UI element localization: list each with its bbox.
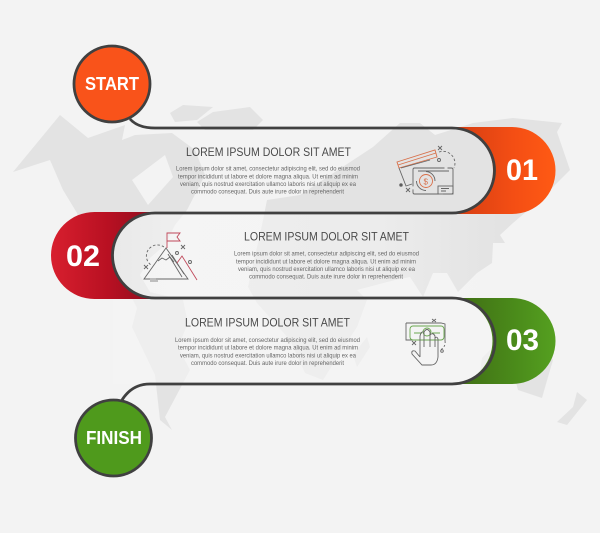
text block 01: Lorem ipsum dolor sit amet, consectetur adipiscing elit, sed do eiusmod [176, 166, 360, 172]
text block 02: veniam, quis nostrud exercitation ullamco laboris nisi ut aliquip ex ea [238, 266, 415, 273]
text block 03: LOREM IPSUM DOLOR SIT AMET [185, 316, 350, 330]
text block 01 [176, 145, 360, 196]
number 02: 02 [66, 240, 100, 273]
band 03 colour tab [450, 298, 556, 384]
band 03 interior [113, 298, 494, 384]
band 02 interior [113, 213, 500, 298]
text block 02: tempor incididunt ut labore et dolore magna aliqua. Ut enim ad minim [236, 258, 416, 266]
finish circle: FINISH [86, 428, 142, 448]
number 01: 01 [506, 154, 538, 187]
band 01 colour tab [450, 127, 556, 214]
text block 01: LOREM IPSUM DOLOR SIT AMET [186, 145, 351, 159]
text block 01: tempor incididunt ut labore et dolore magna aliqua. Ut enim ad minim [178, 174, 358, 180]
icon: hand on banknote [406, 319, 445, 365]
icon: cards and money [397, 146, 455, 194]
text block 02: LOREM IPSUM DOLOR SIT AMET [244, 230, 409, 244]
text block 03: commodo consequat. Duis aute irure dolor in reprehenderit [191, 360, 344, 367]
text block 02: Lorem ipsum dolor sit amet, consectetur adipiscing elit, sed do eiusmod [234, 250, 419, 258]
connecting timeline path [113, 119, 495, 400]
text block 02: commodo consequat. Duis aute irure dolor in reprehenderit [249, 274, 403, 280]
world map silhouette [13, 105, 587, 430]
band 02 colour tab [51, 212, 155, 299]
text block 02 [234, 230, 419, 280]
text block 01: commodo consequat. Duis aute irure dolor in reprehenderit [191, 188, 344, 196]
number 03: 03 [506, 324, 539, 357]
start circle [74, 46, 150, 122]
finish circle [76, 400, 152, 476]
text block 03 [175, 316, 360, 367]
text block 03: Lorem ipsum dolor sit amet, consectetur adipiscing elit, sed do eiusmod [175, 337, 360, 344]
text block 03: tempor incididunt ut labore et dolore magna aliqua. Ut enim ad minim [178, 344, 358, 352]
icon: mountain with flag [144, 233, 197, 281]
text block 01: veniam, quis nostrud exercitation ullamco laboris nisi ut aliquip ex ea [180, 181, 356, 188]
start circle: START [85, 74, 139, 94]
text block 03: veniam, quis nostrud exercitation ullamco laboris nisi ut aliquip ex ea [180, 352, 356, 360]
icon: cards and money: $ [424, 178, 428, 186]
